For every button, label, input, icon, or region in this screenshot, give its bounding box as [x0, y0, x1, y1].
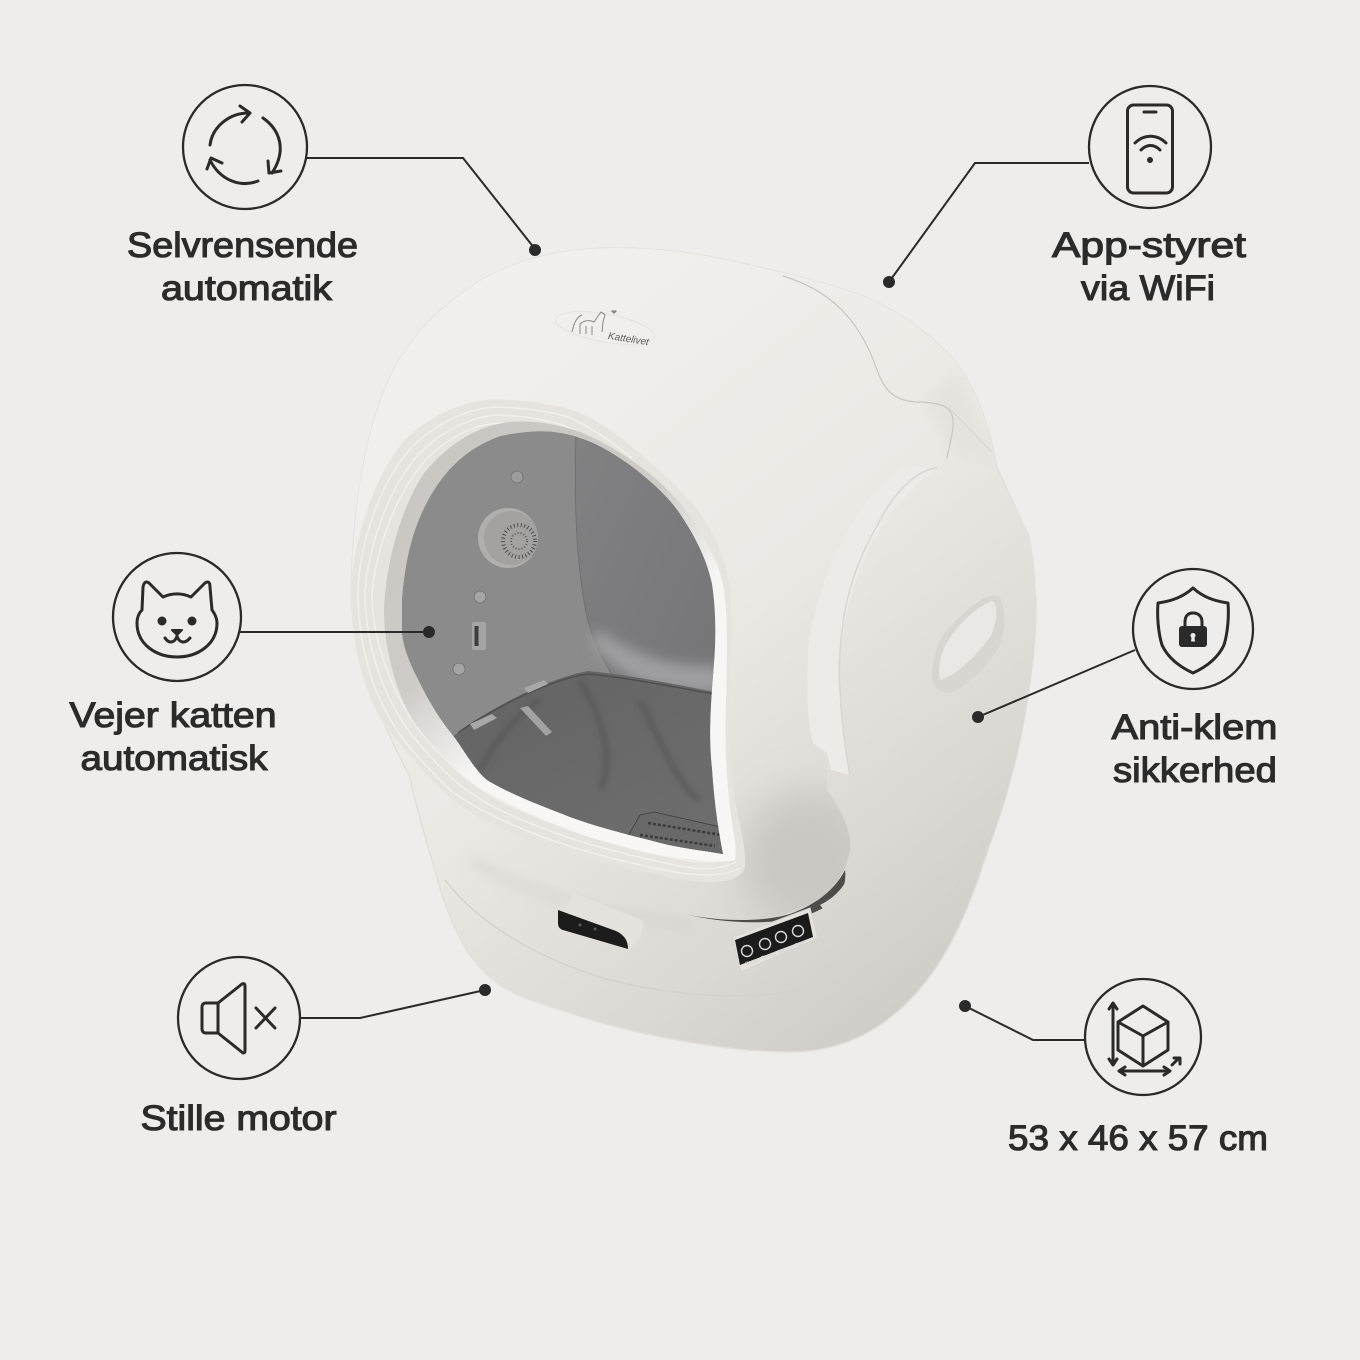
leader line	[300, 990, 485, 1018]
label: Anti-klem	[1112, 708, 1278, 747]
body silhouette	[351, 248, 1036, 1052]
icon: recycling arrows	[183, 85, 307, 209]
control panel: Bildtext	[777, 944, 795, 956]
wall seam	[574, 436, 612, 674]
bag folds	[480, 680, 700, 800]
icon: cube with dimension arrows	[1085, 979, 1201, 1095]
door and rear compartment	[807, 460, 1036, 980]
shade under hood	[685, 870, 845, 922]
base seam	[445, 880, 960, 996]
leader line	[240, 631, 429, 633]
wall screw	[511, 471, 523, 483]
interior	[395, 425, 730, 865]
door edge	[839, 468, 937, 775]
product: self-cleaning litter box	[351, 248, 1036, 1052]
leader line	[978, 650, 1135, 717]
leader line	[965, 1006, 1085, 1040]
bag clips	[470, 680, 548, 730]
callout: silent motor	[140, 957, 491, 1138]
leader dot	[529, 244, 541, 256]
label: Selvrensende	[127, 226, 358, 265]
brand logo: Kattelivet	[607, 331, 651, 348]
leader dot	[972, 711, 984, 723]
rear panel seam	[949, 408, 992, 452]
label: 53 x 46 x 57 cm	[1008, 1119, 1268, 1158]
fan vent	[478, 508, 538, 568]
label: Vejer katten	[70, 696, 276, 735]
control panel	[732, 908, 818, 972]
left wall	[395, 425, 612, 738]
callout: anti-pinch	[972, 569, 1278, 790]
label: automatisk	[80, 739, 268, 778]
ring ridges	[358, 407, 740, 875]
contact shade under hood	[470, 860, 690, 925]
floor light	[590, 630, 720, 694]
handle	[932, 595, 1004, 693]
callout: self-cleaning	[127, 85, 541, 308]
control panel: Tumng	[760, 951, 777, 962]
hood lower shade	[740, 370, 997, 930]
bag label	[628, 812, 723, 854]
leader dot	[479, 984, 491, 996]
ring bevel	[384, 422, 736, 862]
label: App-styret	[1052, 226, 1246, 265]
hood seam	[783, 276, 953, 458]
litter bag	[454, 671, 723, 854]
leader dot	[959, 1000, 971, 1012]
control panel: Camy	[744, 957, 759, 967]
sensor	[558, 893, 643, 950]
callout: app control	[883, 86, 1246, 308]
leader line	[889, 163, 1089, 282]
icon: phone with wifi	[1089, 86, 1211, 208]
leader line	[307, 158, 535, 249]
wall screw	[453, 663, 465, 675]
leader dot	[423, 626, 435, 638]
label: automatik	[161, 269, 333, 308]
icon: shield with lock	[1133, 569, 1253, 689]
door rim	[807, 465, 937, 775]
icon: cat face	[113, 553, 241, 681]
callout: dimensions	[959, 979, 1268, 1158]
hood with entry	[351, 248, 997, 920]
leader dot	[883, 276, 895, 288]
callout: cat weighing	[70, 553, 435, 778]
wall screw	[474, 591, 486, 603]
entry ring	[351, 399, 745, 882]
wall slot	[472, 622, 486, 650]
icon: muted speaker	[178, 957, 300, 1079]
bag strap	[520, 706, 552, 736]
brand logo	[553, 306, 657, 350]
back wall	[395, 425, 730, 865]
label: sikkerhed	[1113, 751, 1277, 790]
label: Stille motor	[140, 1099, 337, 1138]
control panel: Bloct	[794, 939, 807, 949]
label: via WiFi	[1081, 269, 1215, 308]
